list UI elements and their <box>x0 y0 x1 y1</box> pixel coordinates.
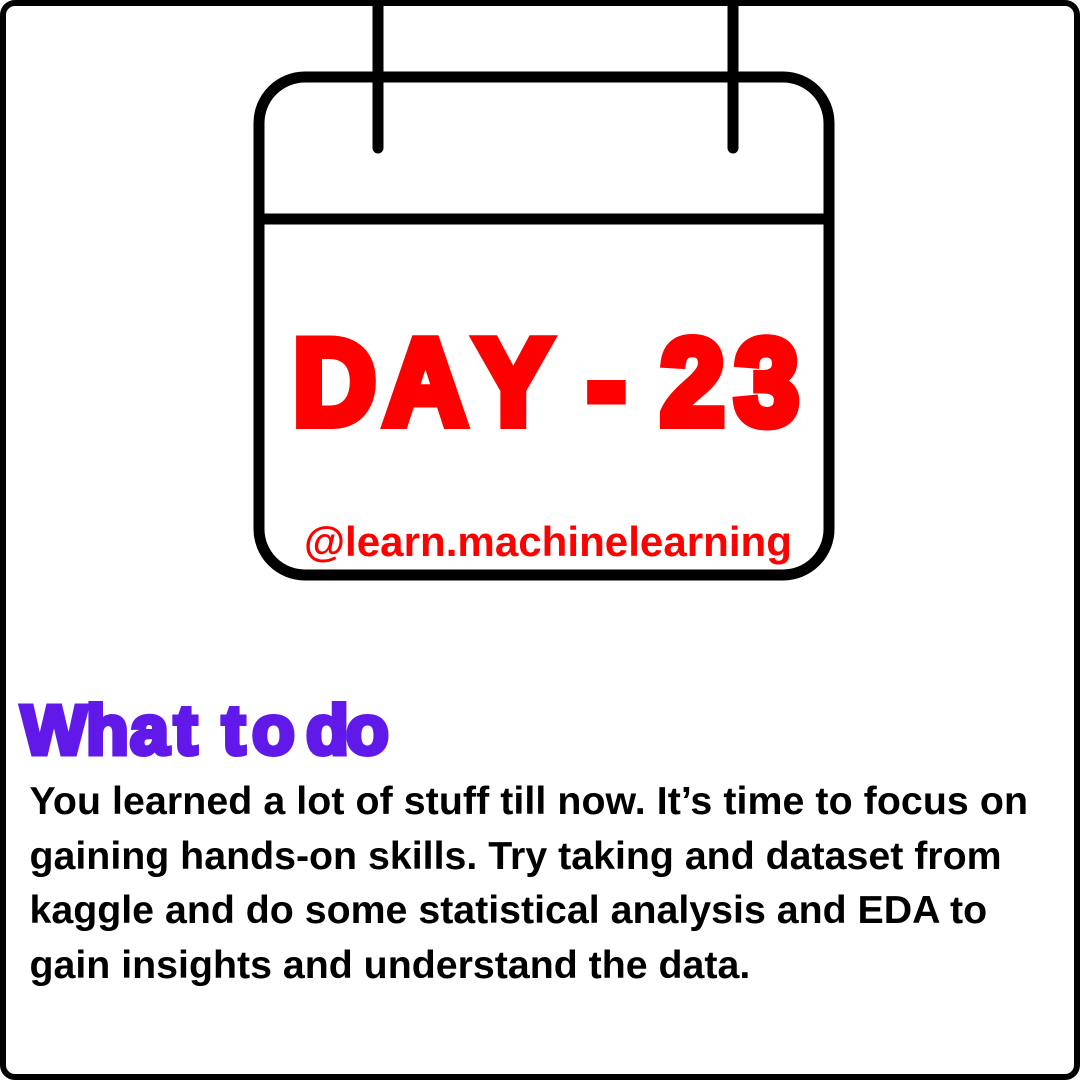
body text: gaining hands-on skills. Try taking and dataset from <box>30 834 1002 878</box>
handle: @learn.machinelearning <box>304 518 792 565</box>
body text: kaggle and do some statistical analysis and EDA to <box>30 888 987 932</box>
body text: You learned a lot of stuff till now. It’s time to focus on <box>30 779 1028 823</box>
day label: DAY - 23 <box>293 315 799 451</box>
body text: gain insights and understand the data. <box>30 943 750 987</box>
heading: What to do <box>21 691 389 769</box>
icon: calendar <box>259 0 829 575</box>
body text <box>30 779 1028 987</box>
